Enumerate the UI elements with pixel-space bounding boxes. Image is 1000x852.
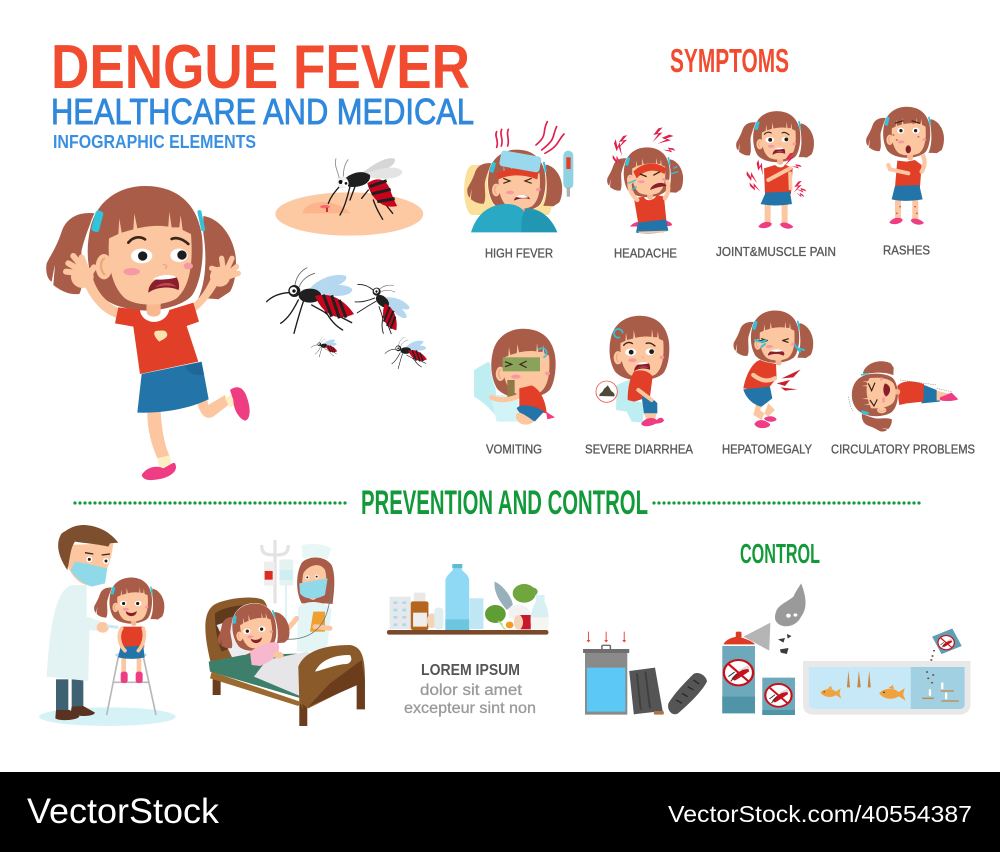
symptom: circulatory problems bbox=[848, 361, 958, 432]
text block: lorem ipsum: excepteur sint non bbox=[404, 700, 536, 717]
title bbox=[51, 33, 474, 152]
symptom: severe diarrhea bbox=[596, 316, 669, 426]
label: vomiting: VOMITING bbox=[486, 442, 542, 456]
label: headache: HEADACHE bbox=[614, 246, 677, 260]
label: circulatory problems: CIRCULATORY PROBLEMS bbox=[831, 442, 975, 456]
section heading: prevention and control: PREVENTION AND CONTROL bbox=[361, 484, 648, 522]
footer url: VectorStock.com/40554387 bbox=[668, 801, 972, 827]
symptom: headache bbox=[607, 127, 683, 233]
nurse with girl in hospital bed bbox=[205, 540, 365, 726]
symptom: hepatomegaly bbox=[733, 311, 813, 428]
subtitle: infographic elements: INFOGRAPHIC ELEMENTS bbox=[53, 132, 256, 152]
spray can and repellent packet bbox=[722, 583, 806, 715]
text block: lorem ipsum: dolor sit amet bbox=[420, 682, 523, 699]
mosquito group bbox=[267, 267, 427, 369]
symptom: high fever bbox=[464, 122, 573, 232]
label: joint and muscle pain: JOINT&MUSCLE PAIN bbox=[716, 245, 836, 259]
healthy food and medicine shelf bbox=[387, 564, 549, 635]
symptom: joint and muscle pain bbox=[736, 111, 814, 229]
heading: symptoms: SYMPTOMS bbox=[670, 42, 789, 79]
subtitle: healthcare and medical: HEALTHCARE AND MEDICAL bbox=[51, 91, 474, 132]
label: hepatomegaly: HEPATOMEGALY bbox=[722, 442, 813, 456]
label: severe diarrhea: SEVERE DIARRHEA bbox=[585, 442, 694, 456]
footer brand: VectorStock bbox=[27, 792, 220, 831]
footer bar bbox=[0, 772, 1000, 852]
water tank with fish bbox=[803, 628, 970, 715]
heading: control: CONTROL bbox=[740, 538, 820, 569]
label: high fever: HIGH FEVER bbox=[485, 246, 553, 260]
top mosquito biting skin bbox=[275, 158, 423, 236]
text block: lorem ipsum: LOREM IPSUM bbox=[421, 662, 520, 679]
doctor vaccinating girl bbox=[39, 525, 176, 726]
symptom: vomiting bbox=[474, 329, 556, 425]
bins and tyre bbox=[583, 632, 707, 715]
main girl scared illustration bbox=[46, 186, 250, 480]
symptom: rashes bbox=[866, 107, 944, 225]
label: rashes: RASHES bbox=[883, 244, 930, 258]
text block: lorem ipsum bbox=[404, 662, 536, 717]
title: dengue fever: DENGUE FEVER bbox=[51, 33, 470, 102]
